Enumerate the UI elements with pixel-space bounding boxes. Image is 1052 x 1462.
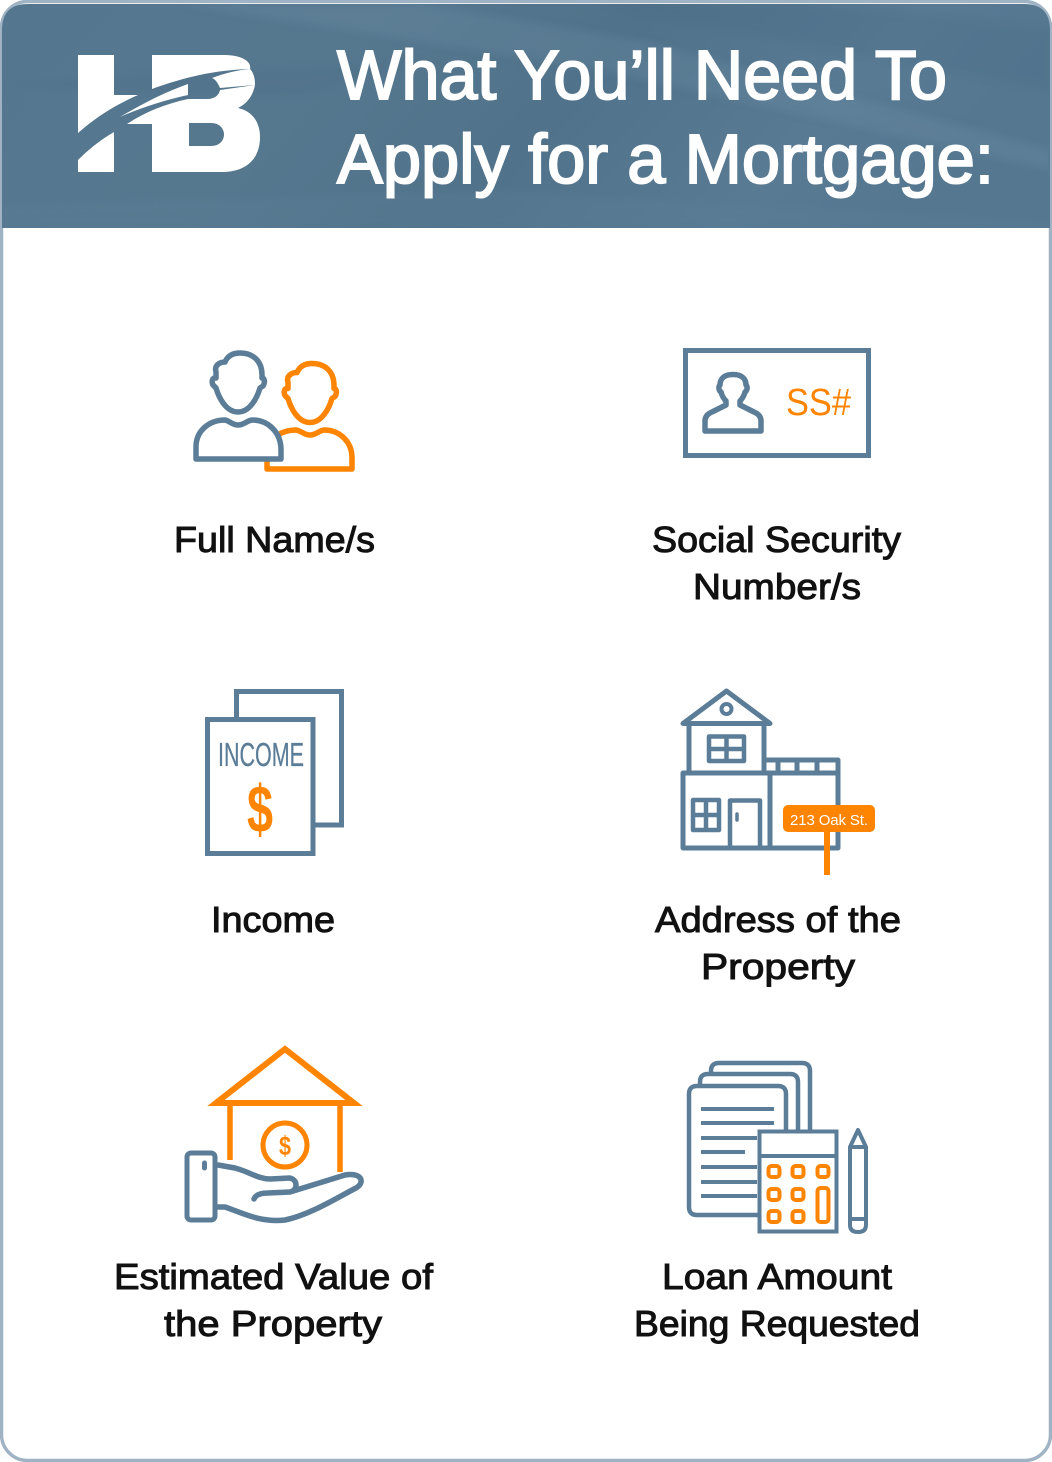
item: loan amount [634,1063,920,1344]
item: estimated value [114,1049,434,1344]
item: social security number [652,350,901,607]
icon: hand holding house: $ [279,1131,291,1161]
item: address [655,691,901,987]
logo [78,55,260,172]
label: Social Security [652,519,901,560]
label [114,1256,434,1344]
item: income [208,692,342,940]
icon: house with street sign: 213 Oak St. [790,812,868,829]
label: Being Requested [634,1303,920,1344]
icon: hand holding house [187,1049,361,1221]
label: Income [211,899,335,940]
label: Loan Amount [662,1256,892,1297]
header banner [0,4,1052,228]
item: full names [174,353,375,560]
label: Number/s [693,566,861,607]
label [655,899,901,987]
icon: two people [196,353,352,469]
icon: ID card [686,350,868,456]
label: the Property [164,1303,382,1344]
label: Full Name/s [174,519,375,560]
label [634,1256,920,1344]
icon: ID card: SS# [786,382,851,424]
icon: income documents [208,692,342,854]
icon: income documents: INCOME [218,736,304,773]
title [337,36,994,198]
title: Apply for a Mortgage: [337,120,994,198]
label: Property [701,946,855,987]
label: Address of the [655,899,901,940]
title: What You’ll Need To [337,36,947,114]
icon: documents, calculator and pencil [689,1063,866,1232]
icon: house with street sign [683,691,875,875]
label [652,519,901,607]
icon: income documents: $ [247,772,273,847]
label: Estimated Value of [114,1256,434,1297]
